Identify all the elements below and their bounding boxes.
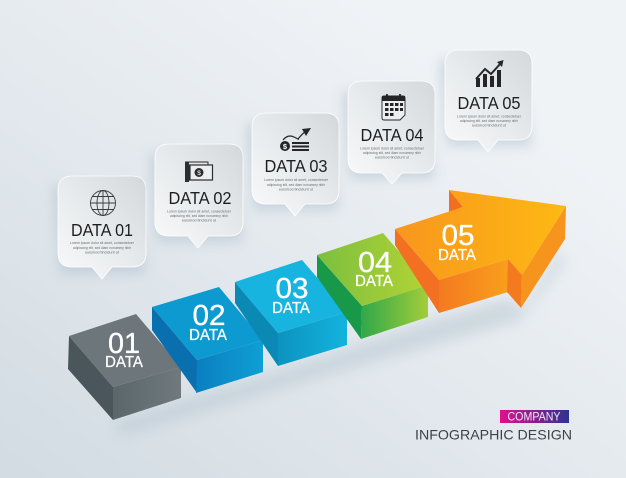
label: DATA: DATA [189,327,228,344]
heading: DATA 01: DATA 01 [71,220,133,240]
icon: growth chart [476,60,504,87]
label: 01: 01 [108,328,140,360]
label: 02: 02 [192,300,226,332]
label: DATA: DATA [105,354,144,371]
text block: card 05: Lorem ipsum dolor sit amet, consectetuer [457,114,522,118]
label: DATA: DATA [438,247,477,264]
tagline: INFOGRAPHIC DESIGN [415,426,572,442]
text block: card 01: Lorem ipsum dolor sit amet, consectetuer [70,241,135,245]
text block: card 04: euismod tincidunt ut [375,156,409,160]
label: 04: 04 [358,247,392,279]
label: 05: 05 [442,220,474,252]
text block: card 04: Lorem ipsum dolor sit amet, consectetuer [360,146,425,150]
panel: card 04 [342,81,435,184]
step 05 arrow [395,190,566,313]
text block: card 02 [167,210,232,222]
label: DATA: DATA [272,300,311,317]
text block: card 03: adipiscing elit, sed diam nonummy nibh [267,183,325,187]
step 04 block [317,233,428,339]
text block: card 02: Lorem ipsum dolor sit amet, consectetuer [167,210,232,214]
icon: banknote: $ [197,170,201,177]
panel: card 03 [246,113,339,216]
label: DATA: DATA [355,273,394,290]
heading: DATA 03: DATA 03 [264,156,328,176]
text block: card 04 [360,146,425,160]
heading: DATA 04: DATA 04 [360,125,424,145]
text block: card 01 [70,241,135,254]
icon: globe [90,190,116,216]
step 01 block [68,314,181,420]
icon: money growth: $ [283,142,288,151]
text block: card 03: euismod tincidunt ut [279,188,313,192]
icon: calendar [382,94,405,120]
arrow shadow [113,250,565,436]
panel: card 02 [149,144,243,248]
text block: card 05: adipiscing elit, sed diam nonummy nibh [460,119,518,123]
company badge: COMPANY [508,412,561,424]
panel: card 01 [52,176,146,279]
text block: card 04: adipiscing elit, sed diam nonummy nibh [363,151,421,155]
text block: card 02: euismod tincidunt ut [182,218,216,222]
text block: card 01: adipiscing elit, sed diam nonummy nibh [73,246,131,250]
heading: DATA 02: DATA 02 [168,188,232,208]
text block: card 05 [457,114,522,128]
heading: DATA 05: DATA 05 [458,93,520,113]
text block: card 03: Lorem ipsum dolor sit amet, consectetuer [264,178,329,182]
text block: card 05: euismod tincidunt ut [472,124,506,128]
step 03 block [235,260,347,366]
step 02 block [152,287,263,393]
text block: card 02: adipiscing elit, sed diam nonummy nibh [170,214,228,218]
panel: card 05 [439,50,532,152]
brand block [415,410,572,442]
label: 03: 03 [276,273,308,305]
text block: card 03 [264,178,329,192]
text block: card 01: euismod tincidunt ut [85,250,119,254]
